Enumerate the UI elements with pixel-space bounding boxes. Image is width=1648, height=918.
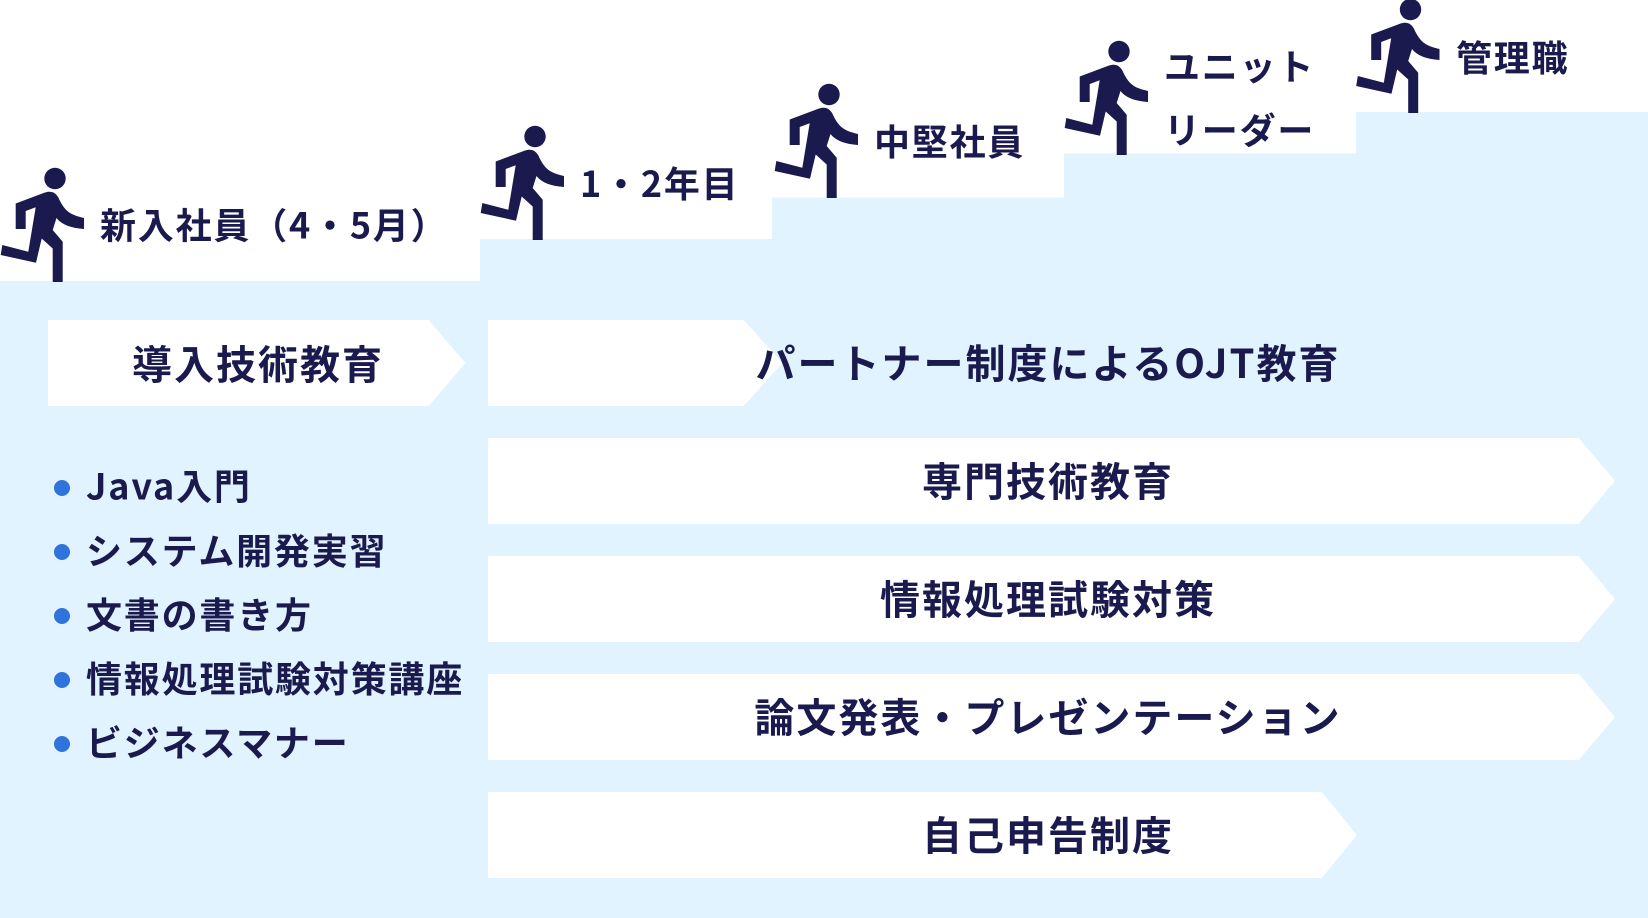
arrow: introductory technical education — [50, 322, 464, 404]
step 5: manager — [1356, 0, 1569, 113]
arrow: self-assessment system — [490, 794, 1355, 876]
list item: exam course: 情報処理試験対策講座 — [86, 651, 464, 703]
label: 管理職 — [1456, 30, 1569, 82]
label: リーダー — [1164, 102, 1315, 154]
arrow: papers and presentation — [490, 676, 1613, 758]
arrow: IT exam preparation: 情報処理試験対策 — [880, 568, 1216, 626]
label: 中堅社員 — [874, 114, 1025, 166]
step 4: unit leader — [1065, 39, 1315, 155]
icon: runner — [1065, 41, 1148, 155]
list item: system development: システム開発実習 — [86, 523, 387, 575]
arrow: papers and presentation: 論文発表・プレゼンテーション — [754, 686, 1342, 744]
icon: runner — [1, 168, 84, 282]
arrow: IT exam preparation — [490, 558, 1613, 640]
arrow: specialist technical education: 専門技術教育 — [922, 450, 1174, 508]
label: ユニット — [1164, 39, 1315, 91]
arrow: introductory technical education: 導入技術教育 — [132, 333, 384, 391]
arrow: partner OJT education: パートナー制度によるOJT教育 — [755, 332, 1341, 390]
icon: runner — [775, 84, 858, 198]
list item: writing: 文書の書き方 — [86, 587, 313, 639]
step 1: new employee — [1, 168, 448, 282]
label: 新入社員（4・5月） — [100, 198, 448, 250]
arrow: specialist technical education — [490, 440, 1613, 522]
bullet list: introductory courses — [54, 458, 464, 767]
label — [1164, 39, 1315, 154]
list item: business manners: ビジネスマナー — [86, 715, 350, 767]
icon: runner — [1356, 0, 1440, 113]
arrow: self-assessment system: 自己申告制度 — [922, 804, 1174, 862]
arrow: partner OJT education — [490, 322, 1341, 404]
label: 1・2年目 — [580, 156, 739, 208]
icon: runner — [481, 126, 564, 240]
list item: Java: Java入門 — [86, 458, 252, 510]
step 2: first and second year — [481, 126, 739, 240]
step 3: mid-level employee — [775, 84, 1025, 198]
